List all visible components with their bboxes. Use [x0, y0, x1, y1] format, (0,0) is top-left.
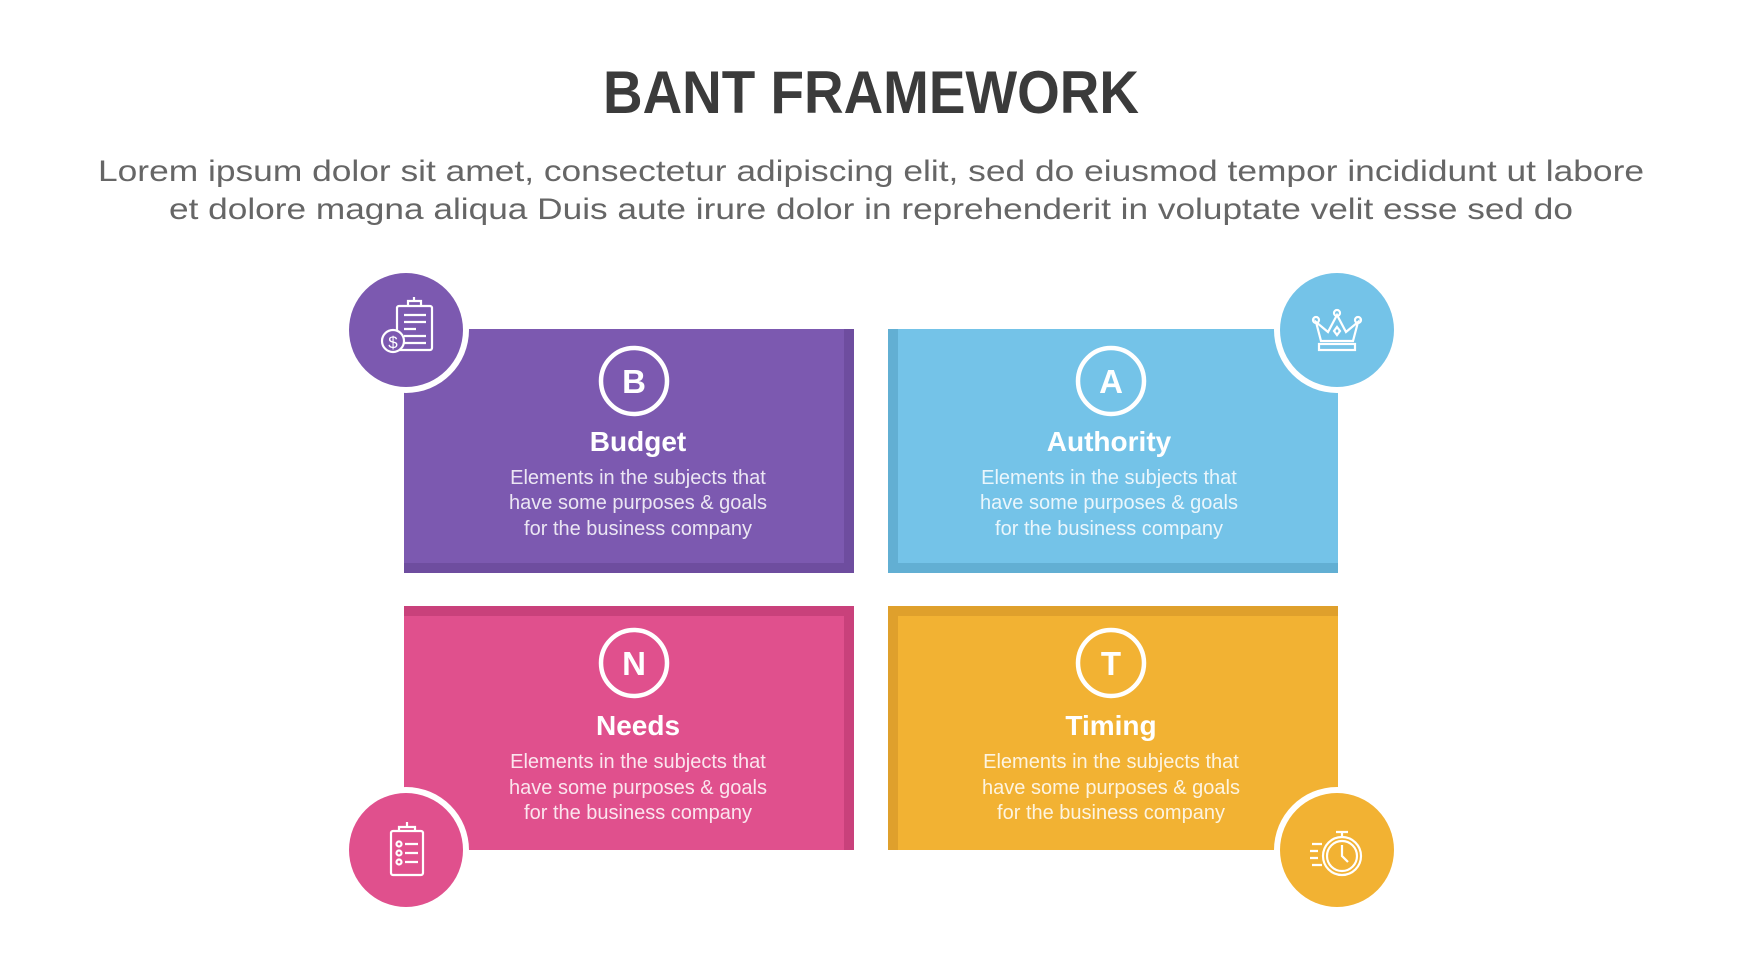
letter badge N — [601, 630, 667, 696]
text: needs description: Elements in the subjects that — [510, 751, 766, 773]
text: needs description — [509, 751, 767, 824]
text: budget description: Elements in the subjects that — [510, 467, 766, 489]
text: timing description: Elements in the subjects that — [983, 751, 1239, 773]
text: timing description: have some purposes & goals — [982, 777, 1240, 799]
text: budget description: for the business company — [524, 518, 752, 540]
letter badge B: B — [622, 363, 646, 400]
title: BANT FRAMEWORK — [603, 59, 1139, 126]
text: authority description: Elements in the subjects that — [981, 467, 1237, 489]
text: authority description: have some purposes & goals — [980, 492, 1238, 514]
panel: budget — [404, 329, 854, 573]
text: budget description — [509, 467, 767, 540]
panel: authority — [888, 329, 1338, 573]
subtitle: et dolore magna aliqua Duis aute irure dolor in reprehenderit in voluptate velit esse sed do — [169, 193, 1573, 226]
heading: Authority: Authority — [1047, 426, 1172, 457]
letter badge N: N — [622, 645, 646, 682]
heading: Budget: Budget — [590, 426, 686, 457]
letter badge T: T — [1101, 645, 1121, 682]
icon: timing stopwatch — [1274, 787, 1400, 913]
icon: budget clipboard with dollar: $ — [388, 333, 398, 352]
text: needs description: for the business company — [524, 802, 752, 824]
text: authority description — [980, 467, 1238, 540]
panel: needs — [404, 606, 854, 850]
text: needs description: have some purposes & goals — [509, 777, 767, 799]
letter badge A: A — [1099, 363, 1123, 400]
text: timing description: for the business company — [997, 802, 1225, 824]
panel: timing — [888, 606, 1338, 850]
text: timing description — [982, 751, 1240, 824]
text: authority description: for the business company — [995, 518, 1223, 540]
icon: needs checklist — [343, 787, 469, 913]
subtitle — [98, 155, 1644, 226]
heading: Timing: Timing — [1065, 710, 1157, 741]
letter badge B — [601, 348, 667, 414]
letter badge T — [1078, 630, 1144, 696]
subtitle: Lorem ipsum dolor sit amet, consectetur adipiscing elit, sed do eiusmod tempor incididunt ut labore — [98, 155, 1644, 188]
heading: Needs: Needs — [596, 710, 680, 741]
icon: authority crown — [1274, 267, 1400, 393]
icon: budget clipboard with dollar — [343, 267, 469, 393]
letter badge A — [1078, 348, 1144, 414]
text: budget description: have some purposes & goals — [509, 492, 767, 514]
